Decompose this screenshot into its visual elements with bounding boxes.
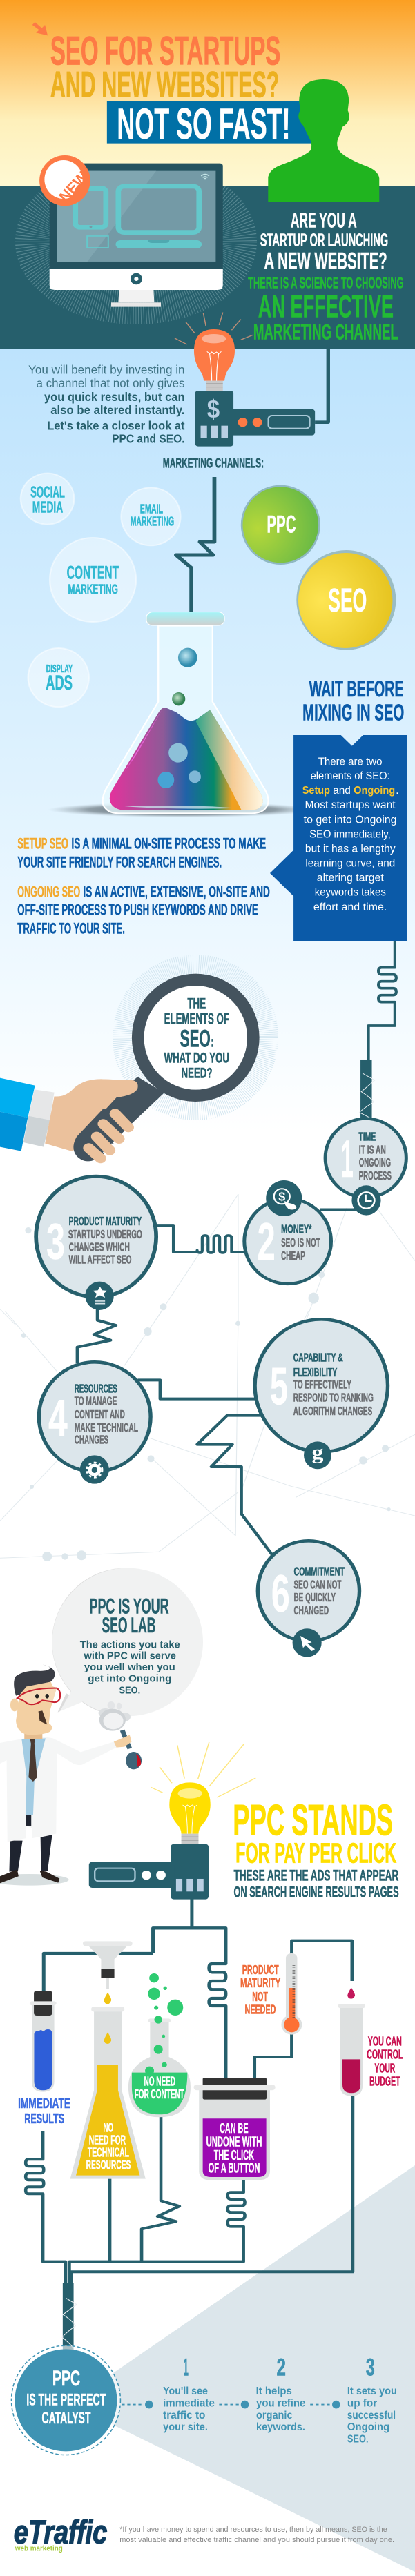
heading: the elements of SEO: THE (187, 995, 206, 1013)
step 3: SEO. (347, 2434, 369, 2445)
cuff (28, 1089, 55, 1120)
speech bubble: PPC is your SEO lab: The actions you take (80, 1639, 180, 1650)
test tube: immediate results (18, 1991, 70, 2127)
bubble: social media: SOCIAL (30, 483, 65, 501)
element 4: resources: CHANGES (75, 1434, 108, 1447)
element 3: product maturity: CHANGES WHICH (69, 1240, 130, 1254)
element 6: commitment: BE QUICKLY (293, 1591, 336, 1605)
wire: machine to flask (176, 477, 214, 612)
bubble: content marketing: MARKETING (68, 582, 118, 597)
step 3: Ongoing (347, 2421, 389, 2433)
text block: you will benefit: You will benefit by investing in (28, 363, 185, 377)
element 5: capability and flexibility: TO EFFECTIVELY (293, 1378, 351, 1392)
bubble: social media: MEDIA (32, 498, 63, 516)
icon: yellow light bulb and machine (89, 1742, 255, 1900)
speech bubble: PPC is your SEO lab (52, 1568, 203, 1716)
liquid (110, 708, 262, 810)
step 3: successful (347, 2410, 396, 2421)
logo: eTraffic: web marketing (15, 2545, 63, 2553)
element 3: product maturity: PRODUCT MATURITY (69, 1215, 142, 1229)
PPC catalyst circle: PPC (52, 2366, 80, 2390)
transformer coil to element one (360, 1060, 375, 1118)
element 5: capability and flexibility: CAPABILITY & (293, 1352, 343, 1365)
element 3: product maturity: 3 (46, 1212, 65, 1269)
funnel and erlenmeyer flask: no need for technical resources: RESOURCES (86, 2158, 131, 2172)
beaker: can be undone: UNDONE WITH (206, 2134, 262, 2149)
floating balls (178, 648, 197, 667)
beaker: can be undone: OF A BUTTON (209, 2160, 260, 2176)
icon: orange bulb and machine (194, 329, 315, 447)
thermometer: product maturity not needed (240, 1953, 302, 2035)
text block: setup and ongoing SEO: TRAFFIC TO YOUR SITE. (17, 920, 125, 937)
element 6: commitment (258, 1541, 360, 1657)
step 3 (347, 2353, 397, 2445)
test tube: you can control your budget (338, 1987, 403, 2096)
bubble: social media (21, 474, 74, 525)
thermometer: product maturity not needed: PRODUCT (242, 1963, 279, 1978)
element 2: money: 2 (258, 1212, 276, 1271)
hand holding magnifier (0, 974, 260, 1161)
bubble: display ads (28, 648, 89, 707)
goggles (17, 1688, 60, 1704)
device icons on screen (75, 188, 106, 227)
panel: blue callout box: There are two (318, 755, 382, 768)
heading: marketing channels: MARKETING CHANNELS: (163, 455, 264, 471)
magnifier rays (122, 964, 269, 1111)
step 3: 3 (366, 2353, 375, 2381)
network background lines (0, 1194, 415, 1325)
panel: blue callout box: Most startups want (305, 799, 396, 811)
footnote: most valuable and effective traffic channel and you should pursue it from day one. (119, 2536, 394, 2544)
flask lip (146, 612, 224, 625)
step 2: It helps (256, 2385, 292, 2397)
panel: blue callout box: effort and time. (313, 901, 387, 913)
panel: blue callout box: but it has a lengthy (305, 842, 396, 855)
wire: machine to band (315, 345, 328, 422)
text block: setup and ongoing SEO (17, 835, 270, 937)
icon: google g (304, 1441, 331, 1469)
marketing channel bubbles (21, 474, 180, 707)
element 5: capability and flexibility: FLEXIBILITY (293, 1366, 337, 1380)
speech bubble: PPC is your SEO lab: get into Ongoing (88, 1674, 171, 1684)
magnifier handle (73, 1077, 164, 1161)
element 4: resources (39, 1362, 151, 1484)
text block: you will benefit: a channel that not only gives (37, 376, 185, 391)
bubble: PPC (241, 485, 320, 565)
bubble: PPC: PPC (267, 511, 296, 538)
shadow under flask (48, 802, 317, 817)
element 5: capability and flexibility (255, 1319, 388, 1469)
element 4: resources: MAKE TECHNICAL (75, 1421, 138, 1435)
icon: coin and pointer: $ (278, 1190, 286, 1203)
heading: title (32, 22, 311, 148)
heading: the elements of SEO: ELEMENTS OF (164, 1011, 229, 1028)
element 1: time: 1 (341, 1130, 354, 1189)
round flask: no need for content (128, 1973, 191, 2117)
monitor illustration (50, 164, 223, 307)
sunburst rays behind monitor (32, 176, 240, 307)
head (24, 1733, 42, 1739)
text block: you will benefit: Let's take a closer look at (47, 419, 185, 433)
text block: you will benefit: also be altered instantly. (50, 403, 185, 418)
funnel and erlenmeyer flask: no need for technical resources: TECHNICAL (88, 2146, 129, 2160)
element 3: product maturity: WILL AFFECT SEO (69, 1253, 132, 1267)
heading: the elements of SEO: WHAT DO YOU (164, 1049, 229, 1066)
bubble: email marketing: MARKETING (131, 515, 174, 529)
hand (45, 1079, 138, 1151)
background: sky gradient (0, 349, 415, 1132)
step 3: It sets you (347, 2385, 397, 2397)
PPC catalyst circle: IS THE PERFECT (26, 2390, 106, 2410)
text block: you will benefit: PPC and SEO. (112, 432, 185, 446)
panel: blue callout box: Ongoing (354, 784, 395, 797)
footnote: *If you have money to spend and resources to use, then by all means, SEO is the (119, 2526, 387, 2534)
bubble: email marketing (122, 487, 180, 545)
background: top sunrise gradient (0, 0, 415, 186)
magnifier glass (132, 974, 260, 1102)
text block: setup and ongoing SEO: ONGOING SEO (17, 884, 80, 901)
thermometer: product maturity not needed: NEEDED (245, 2003, 276, 2017)
element 4: resources: RESOURCES (75, 1382, 117, 1396)
element 2: money: CHEAP (281, 1249, 305, 1263)
element 4: resources: CONTENT AND (75, 1408, 125, 1422)
funnel and erlenmeyer flask: no need for technical resources: NEED FOR (89, 2134, 126, 2147)
element 5: capability and flexibility: 5 (270, 1358, 288, 1416)
step 1: immediate (163, 2398, 215, 2409)
icon: coin and pointer (266, 1180, 302, 1216)
element 4: resources: 4 (48, 1389, 68, 1447)
step 1: You'll see (163, 2385, 208, 2397)
text block: setup and ongoing SEO: SETUP SEO (17, 835, 68, 852)
round flask: no need for content: FOR CONTENT (135, 2087, 184, 2102)
flask glass (103, 626, 269, 813)
heading: wait before mixing in SEO (302, 676, 404, 725)
fingers (88, 1113, 128, 1158)
element 4: resources: TO MANAGE (75, 1395, 117, 1408)
background: bottom triangle (69, 2165, 415, 2572)
step 2: organic (256, 2410, 293, 2421)
legs and shoes (9, 1835, 52, 1872)
test tube: immediate results: RESULTS (24, 2110, 64, 2127)
panel: blue callout box: Setup (302, 784, 330, 797)
panel: blue callout box (270, 735, 407, 941)
beaker: can be undone: CAN BE (220, 2120, 249, 2136)
element 2: money: MONEY* (281, 1223, 312, 1236)
bubble: display ads: ADS (46, 671, 73, 694)
beaker: can be undone (194, 2078, 276, 2180)
badge: new sticker: NEW (55, 168, 92, 206)
element 6: commitment: SEO CAN NOT (293, 1579, 342, 1592)
text block: you will benefit (28, 363, 185, 446)
element 6: commitment: 6 (271, 1565, 290, 1623)
element 1: time: TIME (358, 1131, 376, 1144)
step 1: 1 (183, 2353, 189, 2381)
bubble: email marketing: EMAIL (140, 502, 163, 516)
panel: blue callout box: and (333, 784, 351, 797)
icon: person silhouette (268, 79, 379, 202)
panel: blue callout box: altering target (317, 871, 384, 884)
step 2: keywords. (256, 2421, 305, 2433)
element 2: money: SEO IS NOT (281, 1236, 320, 1250)
heading: the elements of SEO: NEED? (182, 1064, 212, 1081)
text block: are you a startup (248, 208, 404, 344)
heading: the elements of SEO: : (211, 1034, 213, 1051)
element 2: money (244, 1180, 331, 1284)
bubble: display ads: DISPLAY (46, 663, 73, 675)
round flask: no need for content: NO NEED (144, 2075, 175, 2089)
step 1: your site. (163, 2421, 208, 2433)
funnel and erlenmeyer flask: no need for technical resources (70, 1941, 146, 2179)
icon: gear (80, 1455, 109, 1484)
heading: PPC stands for pay per click (233, 1797, 399, 1901)
speech bubble: PPC is your SEO lab: SEO LAB (102, 1613, 155, 1637)
text block: you will benefit: you quick results, but can (44, 390, 185, 404)
wires between elements (156, 1209, 356, 1253)
speech bubble: PPC is your SEO lab: you well when you (84, 1662, 175, 1673)
heading: the elements of SEO: SEO (180, 1025, 211, 1052)
element 3: product maturity: STARTUPS UNDERGO (68, 1228, 142, 1242)
network background lines lower (0, 1311, 415, 1561)
speech bubble: PPC is your SEO lab: SEO. (119, 1685, 140, 1696)
scientist illustration (0, 1665, 142, 1886)
PPC catalyst circle: CATALYST (42, 2408, 91, 2428)
PPC catalyst circle (11, 2283, 120, 2455)
step 3: up for (347, 2398, 377, 2409)
icon: star (85, 1282, 114, 1310)
logo: eTraffic: eTraffic (14, 2515, 107, 2550)
text block: setup and ongoing SEO: YOUR SITE FRIENDLY FOR SEARCH ENGINES. (17, 854, 222, 871)
footnote (119, 2526, 394, 2544)
icon: cursor (293, 1628, 322, 1657)
panel: blue callout box: keywords takes (315, 886, 386, 898)
element 3: product maturity (36, 1176, 156, 1310)
arrow (32, 22, 48, 35)
bubble: SEO (296, 550, 396, 650)
bubble: SEO: SEO (328, 581, 367, 618)
step 1 (163, 2353, 215, 2433)
heading: the elements of SEO (164, 995, 229, 1081)
panel: blue callout box: to get into Ongoing (304, 813, 397, 826)
panel: blue callout box: SEO immediately, (309, 828, 391, 840)
element 6: commitment: COMMITMENT (293, 1565, 345, 1579)
step 2: 2 (277, 2353, 286, 2381)
step 2: you refine (256, 2398, 306, 2409)
wires: lab lower circuit (26, 1941, 353, 2283)
step 2 (256, 2353, 306, 2433)
thermometer: product maturity not needed: NOT (252, 1990, 268, 2004)
panel: blue callout box: . (396, 784, 399, 797)
wire: box to element one (369, 941, 396, 1060)
icon: orange light bulb rays (175, 313, 253, 344)
panel: blue callout box: elements of SEO: (311, 770, 390, 782)
badge: new sticker (39, 155, 92, 206)
speech bubble: PPC is your SEO lab: PPC IS YOUR (90, 1594, 169, 1619)
catalyst steps (122, 2353, 397, 2445)
icon: orange bulb and machine: $ (207, 396, 220, 423)
flask illustration (103, 612, 269, 813)
sleeve (0, 1078, 35, 1118)
speech bubble: PPC is your SEO lab: with PPC will serve (84, 1650, 176, 1661)
icon: google g: g (312, 1441, 324, 1463)
thermometer: product maturity not needed: MATURITY (240, 1976, 281, 1991)
panel: blue callout box: learning curve, and (305, 857, 395, 869)
lab coat (0, 1737, 117, 1842)
element 1: time: IT IS AN (359, 1144, 386, 1157)
beaker: can be undone: THE CLICK (214, 2147, 254, 2163)
wire: yellow machine to lab (44, 1896, 226, 2080)
bubble: content marketing: CONTENT (67, 563, 119, 583)
test tube with smoke (122, 1730, 130, 1748)
bubble: content marketing (50, 538, 136, 622)
element 6: commitment: CHANGED (293, 1604, 329, 1618)
test tube: immediate results: IMMEDIATE (18, 2095, 70, 2111)
icon: clock (351, 1185, 381, 1216)
funnel and erlenmeyer flask: no need for technical resources: NO (103, 2121, 113, 2135)
teal header band (0, 186, 415, 349)
step 1: traffic to (163, 2410, 205, 2421)
wires lower elements (77, 1309, 273, 1555)
element 1: time (325, 1119, 406, 1216)
